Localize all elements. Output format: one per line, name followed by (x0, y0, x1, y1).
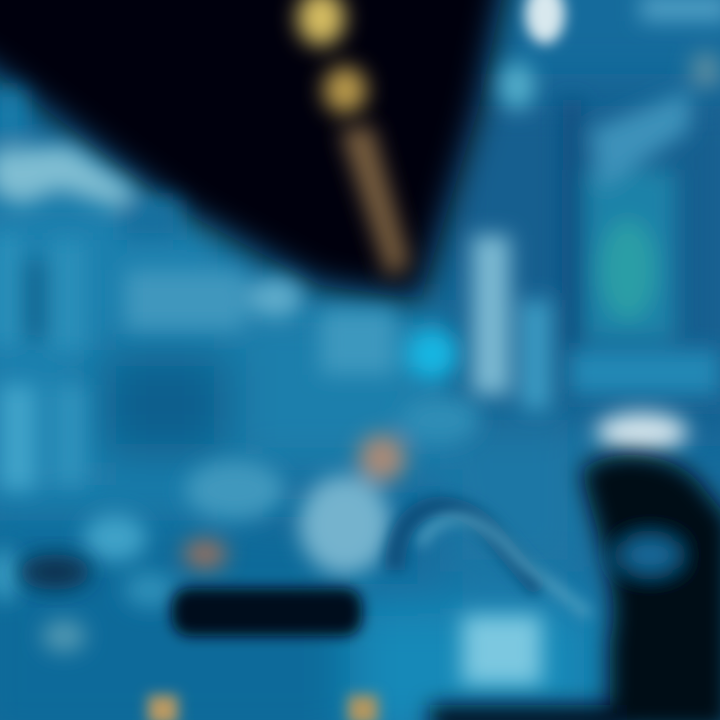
light: bronze streak (340, 125, 410, 278)
dark ceiling (0, 0, 510, 300)
floor light left (148, 695, 178, 720)
white highlight (596, 412, 688, 452)
light: amber middle (323, 66, 367, 114)
light: cyan (499, 62, 535, 110)
dark console (172, 588, 362, 636)
centre details (0, 310, 480, 652)
right column (472, 0, 720, 410)
light: yellow top (297, 0, 345, 46)
ceiling lights (297, 0, 565, 278)
dark arch (395, 507, 540, 590)
light: white top right (525, 0, 565, 44)
dark silhouette (430, 455, 720, 720)
pale arch (420, 518, 590, 615)
floor lights (148, 695, 378, 720)
left pale structure (0, 90, 303, 490)
floor highlight (462, 615, 542, 685)
floor light right (348, 695, 378, 720)
dark spot left (19, 554, 91, 590)
